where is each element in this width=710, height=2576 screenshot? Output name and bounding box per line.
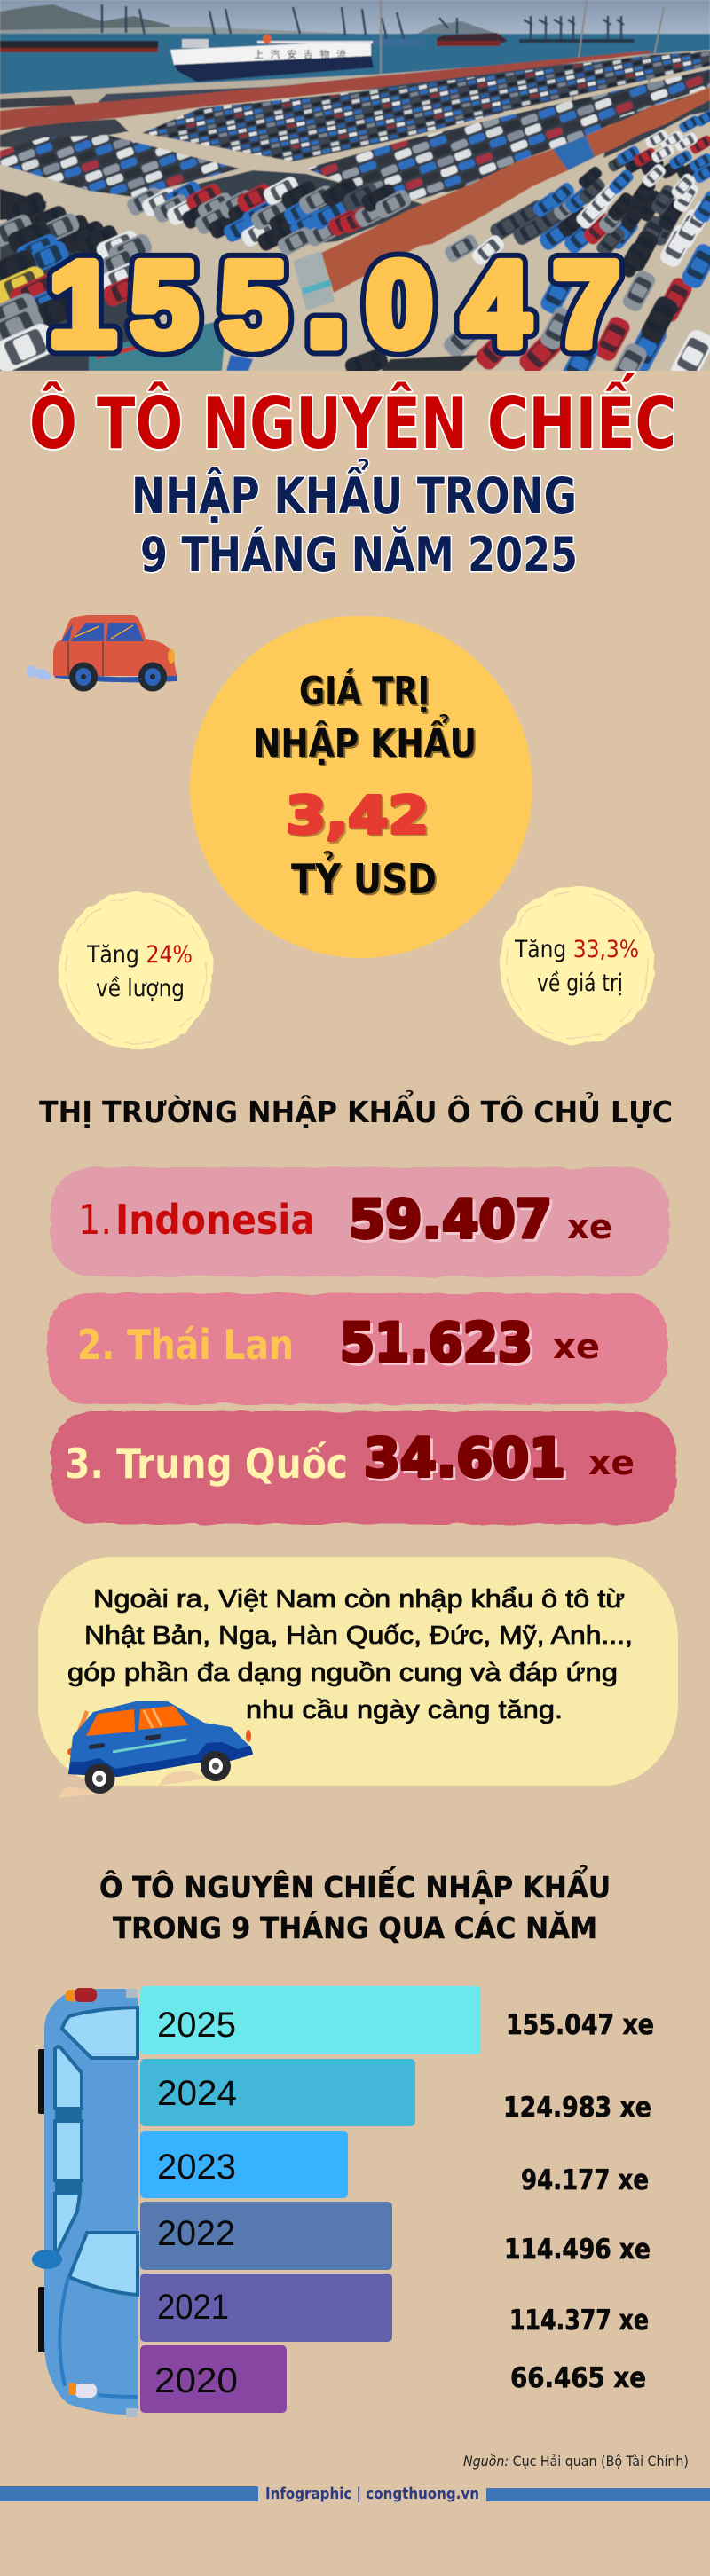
bar 2024 xyxy=(140,2059,415,2126)
bar 2021: 2021 xyxy=(157,2288,229,2327)
title xyxy=(29,373,676,583)
callout: quantity growth: Tăng 24% xyxy=(86,941,193,969)
big number 155.047: 0 xyxy=(366,237,433,372)
footer: Infographic | congthuong.vn xyxy=(265,2485,479,2503)
market row: China xyxy=(51,1411,676,1524)
circle: import value xyxy=(190,616,532,958)
paragraph: Nhật Bản, Nga, Hàn Quốc, Đức, Mỹ, Anh..., xyxy=(84,1622,633,1650)
bar values: 94.177 xe xyxy=(521,2164,649,2196)
market row: Thailand: xe xyxy=(553,1327,600,1366)
heading: main markets: THỊ TRƯỜNG NHẬP KHẨU Ô TÔ CHỦ LỰC xyxy=(39,1089,673,1129)
heading: yearly imports: TRONG 9 THÁNG QUA CÁC NĂM xyxy=(113,1910,597,1945)
market row: Thailand: 51.623 xyxy=(340,1312,532,1374)
hero photo: car port xyxy=(0,0,710,392)
bar 2025: 2025 xyxy=(157,2006,236,2045)
bar 2024: 2024 xyxy=(157,2074,237,2113)
big number 155.047: 0 xyxy=(366,237,433,372)
bar values: 66.465 xe xyxy=(510,2362,646,2394)
bar values: 155.047 xe xyxy=(506,2009,654,2041)
bar 2023: 2023 xyxy=(157,2148,236,2187)
bar values: 114.377 xe xyxy=(509,2305,649,2336)
icon: half car top view xyxy=(32,1988,138,2417)
paragraph: góp phần đa dạng nguồn cung và đáp ứng xyxy=(67,1659,618,1687)
market row: Indonesia: 1. xyxy=(78,1196,112,1244)
footer xyxy=(0,2485,710,2503)
big number 155.047: 7 xyxy=(553,237,620,372)
big number 155.047: 5 xyxy=(220,237,288,372)
market row: Thailand xyxy=(48,1293,667,1404)
icon: blue car xyxy=(59,1701,253,1798)
big number 155.047: 7 xyxy=(553,237,620,372)
market row: Indonesia: 59.407 xyxy=(349,1189,552,1251)
big number 155.047: 5 xyxy=(130,237,198,372)
market row: China: xe xyxy=(588,1443,635,1482)
callout: value growth: về giá trị xyxy=(537,970,623,997)
icon: orange car xyxy=(27,615,177,692)
big number 155.047: 5 xyxy=(130,237,198,372)
market row: Thailand: 2. Thái Lan xyxy=(77,1321,294,1369)
bar 2022: 2022 xyxy=(157,2214,235,2253)
title: 9 THÁNG NĂM 2025 xyxy=(140,527,578,583)
circle: import value: 3,42 xyxy=(286,785,429,845)
bar values xyxy=(503,2009,654,2394)
big number 155.047: . xyxy=(304,207,348,380)
callout: quantity growth: về lượng xyxy=(96,975,185,1002)
bar values: 124.983 xe xyxy=(503,2092,651,2124)
circle: import value: GIÁ TRỊ xyxy=(299,667,430,714)
callout: value growth: Tăng 33,3% xyxy=(514,936,639,963)
heading: yearly imports xyxy=(99,1865,611,1945)
panel: other sources xyxy=(38,1557,678,1786)
source note: Nguồn: Cục Hải quan (Bộ Tài Chính) xyxy=(463,2453,689,2470)
market row: Indonesia: xe xyxy=(567,1207,612,1246)
bar 2020 xyxy=(140,2345,287,2413)
bar values: 114.496 xe xyxy=(504,2234,651,2266)
big number 155.047: 5 xyxy=(220,237,288,372)
market row: China: 3. Trung Quốc xyxy=(65,1440,348,1488)
bar 2022 xyxy=(140,2202,392,2270)
big number 155.047: 1 xyxy=(49,237,116,372)
circle: import value: NHẬP KHẨU xyxy=(253,713,477,766)
title: NHẬP KHẨU TRONG xyxy=(131,459,577,524)
bar 2021 xyxy=(140,2274,392,2342)
bar chart: imports by year xyxy=(140,1986,481,2413)
circle: import value: TỶ USD xyxy=(291,851,437,903)
paragraph xyxy=(67,1585,633,1724)
big number 155.047: 1 xyxy=(49,237,116,372)
big number 155.047: 4 xyxy=(462,237,530,372)
market row: Indonesia: Indonesia xyxy=(115,1196,315,1244)
bar 2025 xyxy=(140,1986,481,2054)
heading: yearly imports: Ô TÔ NGUYÊN CHIẾC NHẬP KHẨU xyxy=(99,1865,611,1905)
paragraph: Ngoài ra, Việt Nam còn nhập khẩu ô tô từ xyxy=(93,1585,625,1614)
callout: value growth xyxy=(500,886,654,1044)
big number 155.047: 4 xyxy=(462,237,530,372)
hero photo: car port: 上汽安吉物流 xyxy=(254,47,346,61)
market row: Indonesia xyxy=(51,1167,669,1276)
bar 2020: 2020 xyxy=(154,2361,238,2400)
big number 155.047 xyxy=(49,207,620,380)
big number 155.047: . xyxy=(304,207,348,380)
market row: China: 34.601 xyxy=(364,1427,565,1489)
callout: quantity growth xyxy=(59,891,213,1049)
paragraph: nhu cầu ngày càng tăng. xyxy=(246,1696,563,1724)
bar 2023 xyxy=(140,2131,348,2198)
